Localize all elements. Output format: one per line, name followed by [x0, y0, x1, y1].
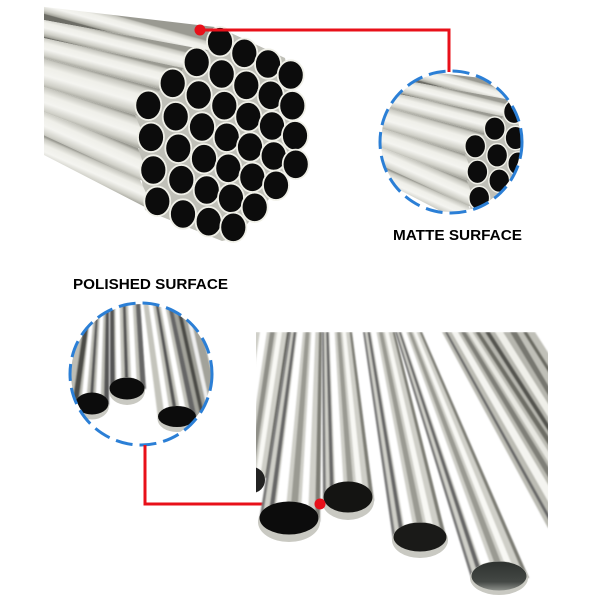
panel: polished tubes photo — [256, 332, 548, 595]
connector: red line from polished circle to tube photo — [145, 445, 320, 504]
magnified matte tubes — [382, 73, 520, 212]
panel: matte surface close-up circle — [378, 70, 524, 214]
far right tube group — [442, 332, 548, 528]
tube bodies — [20, 4, 225, 212]
tube d — [363, 332, 447, 540]
dashed blue ring — [70, 303, 212, 445]
tube c — [322, 332, 374, 501]
tube a — [256, 332, 290, 479]
tube b — [259, 332, 322, 522]
connector: red line from bundle to matte circle — [194, 24, 449, 72]
tube e — [395, 332, 529, 578]
connector dot on polished tube — [314, 498, 326, 510]
magnified polished tubes — [71, 304, 210, 432]
panel: matte tube bundle photo — [20, 4, 309, 242]
dashed blue ring — [380, 71, 522, 213]
tube openings — [135, 27, 309, 242]
panel: polished surface close-up circle — [68, 302, 214, 446]
heading: matte surface: MATTE SURFACE — [393, 228, 522, 244]
bundle front backing — [135, 27, 303, 241]
tube openings — [239, 467, 528, 595]
heading: polished surface: POLISHED SURFACE — [73, 276, 228, 293]
